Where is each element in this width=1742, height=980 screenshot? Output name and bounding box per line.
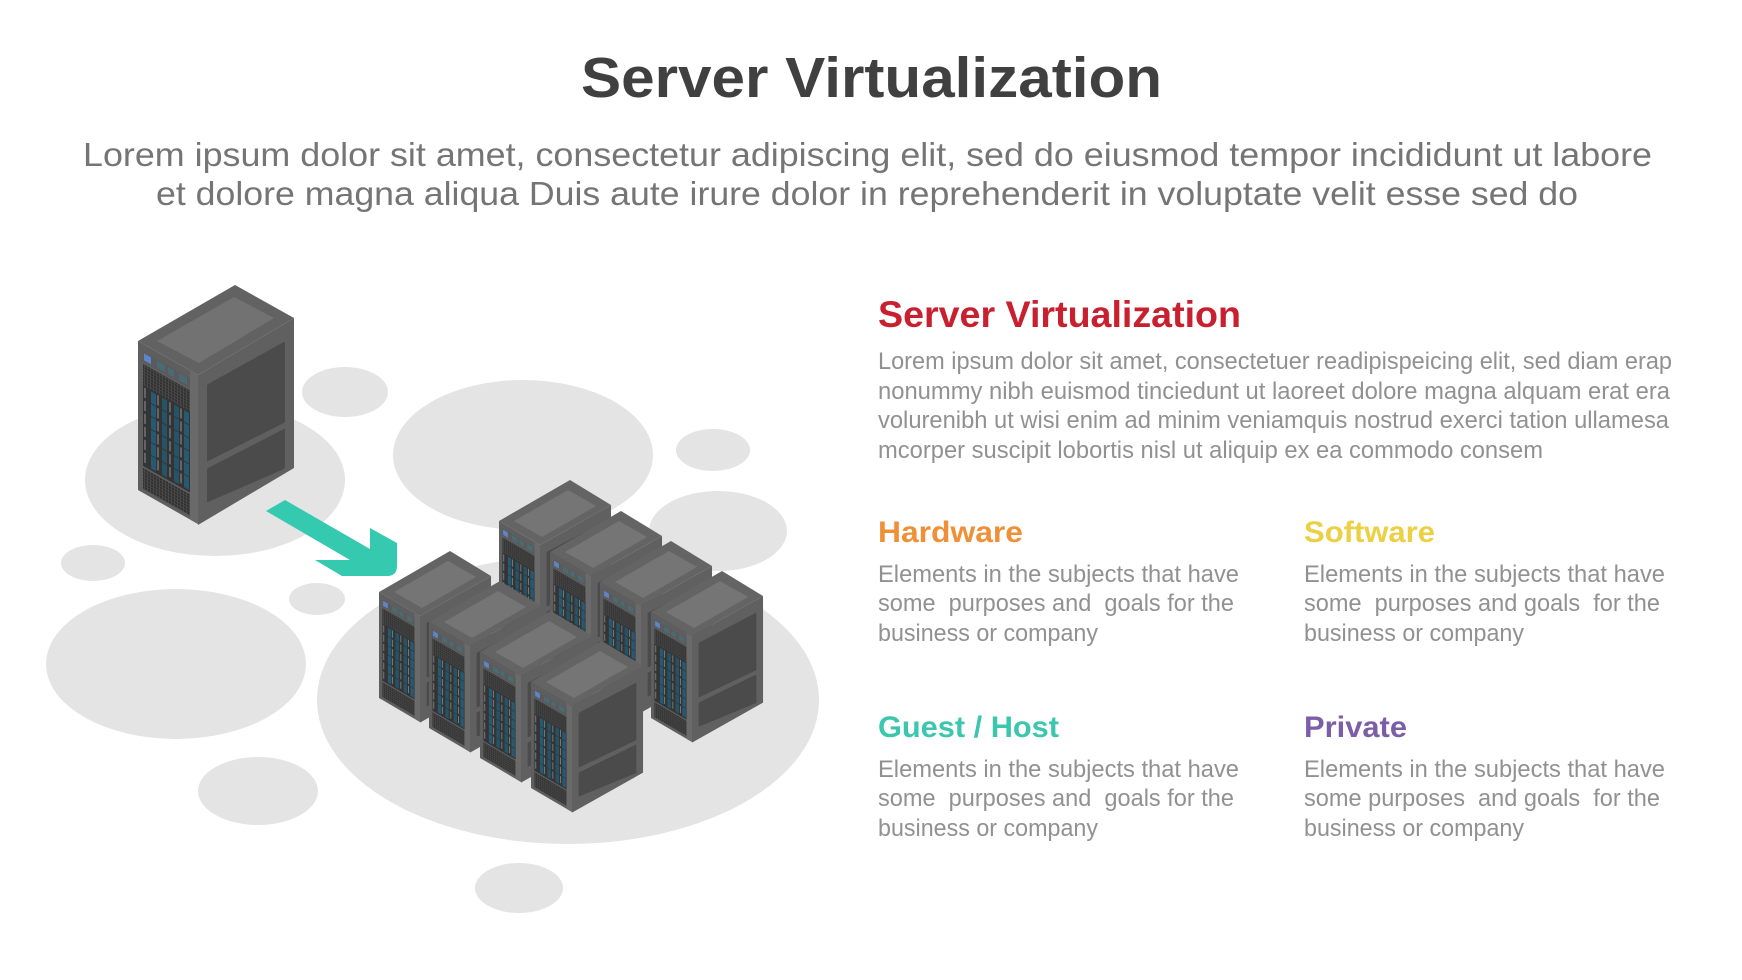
heading: hardware: Hardware (878, 516, 1023, 549)
description: private (1304, 756, 1665, 842)
paragraph: Lorem ipsum dolor sit amet, consectetuer readipispeicing elit, sed diam erap (878, 348, 1672, 375)
heading: server virtualization: Server Virtualization (878, 294, 1241, 335)
icon: server cluster (379, 480, 763, 813)
description: software: some purposes and goals for the (1304, 590, 1660, 617)
description: hardware: Elements in the subjects that have (878, 561, 1239, 588)
subtitle text block: et dolore magna aliqua Duis aute irure dolor in reprehenderit in voluptate velit esse sed do (156, 176, 1578, 213)
description: guest / host (878, 756, 1239, 842)
arrow: server to virtual servers (266, 500, 397, 576)
heading: guest / host: Guest / Host (878, 711, 1059, 744)
description: software (1304, 561, 1665, 647)
subtitle text block (83, 137, 1652, 213)
panel: guest / host (878, 711, 1239, 842)
icon: single physical server (138, 285, 294, 525)
panel: software (1304, 516, 1665, 647)
description: hardware: business or company (878, 620, 1099, 647)
background bubbles (46, 367, 819, 913)
paragraph: nonummy nibh euismod tinciedunt ut laoreet dolore magna alquam erat era (878, 378, 1670, 405)
panel: server virtualization description (878, 294, 1672, 464)
description: private: some purposes and goals for the (1304, 785, 1660, 812)
paragraph (878, 348, 1672, 464)
panel: private (1304, 711, 1665, 842)
panel: hardware (878, 516, 1239, 647)
description: private: business or company (1304, 815, 1525, 842)
title: Server Virtualization (581, 46, 1162, 110)
description: software: Elements in the subjects that have (1304, 561, 1665, 588)
description: hardware (878, 561, 1239, 647)
description: guest / host: business or company (878, 815, 1099, 842)
description: guest / host: Elements in the subjects that have (878, 756, 1239, 783)
description: private: Elements in the subjects that have (1304, 756, 1665, 783)
paragraph: mcorper suscipit lobortis nisl ut aliquip ex ea commodo consem (878, 437, 1543, 464)
description: hardware: some purposes and goals for the (878, 590, 1234, 617)
paragraph: volurenibh ut wisi enim ad minim veniamquis nostrud exerci tation ullamesa (878, 407, 1669, 434)
description: software: business or company (1304, 620, 1525, 647)
heading: private: Private (1304, 711, 1407, 744)
heading: software: Software (1304, 516, 1435, 549)
description: guest / host: some purposes and goals for the (878, 785, 1234, 812)
subtitle text block: Lorem ipsum dolor sit amet, consectetur adipiscing elit, sed do eiusmod tempor incididunt ut labore (83, 137, 1652, 174)
